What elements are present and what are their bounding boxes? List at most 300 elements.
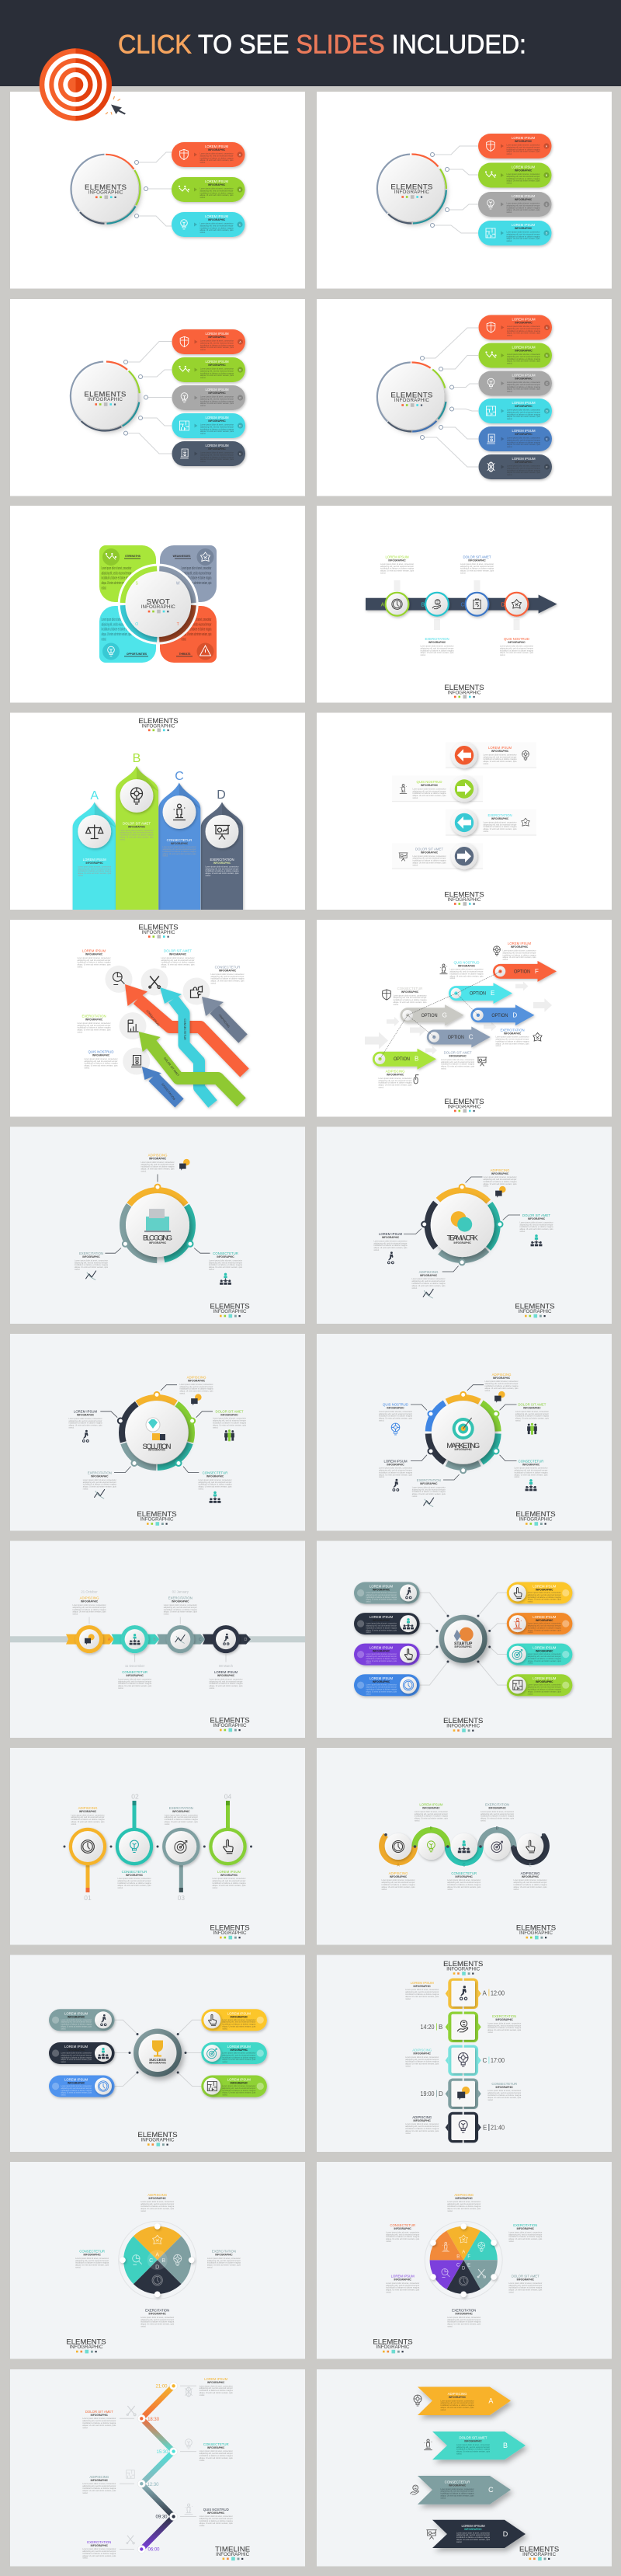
icon: gears bbox=[391, 1423, 400, 1435]
callout: adipiscing bbox=[82, 2475, 116, 2494]
time labels: 15:30 bbox=[156, 2450, 168, 2455]
time labels: 06:00 bbox=[147, 2548, 160, 2553]
logo bbox=[138, 717, 179, 732]
logo: INFOGRAPHIC bbox=[446, 1724, 480, 1729]
callout: consectetur: INFOGRAPHIC bbox=[206, 1475, 224, 1478]
callout: lorem ipsum: INFOGRAPHIC bbox=[85, 953, 103, 956]
pill left 1 bbox=[49, 2009, 115, 2031]
arrow labels: CONSECTETUR bbox=[183, 1018, 186, 1040]
callout: 02 January exercitation bbox=[164, 1590, 198, 1616]
callout: dolor sit amet: DOLOR SIT AMET bbox=[444, 1051, 472, 1055]
icon: org bbox=[526, 1479, 536, 1491]
arrow: option B green bbox=[373, 1049, 436, 1070]
icon: chat bbox=[191, 1394, 202, 1405]
callout: dolor sit amet bbox=[520, 1213, 553, 1233]
arrow tag A bbox=[418, 2386, 511, 2415]
callout: adipiscing: INFOGRAPHIC bbox=[414, 2052, 432, 2056]
step circle C bbox=[464, 592, 489, 617]
icon circles bbox=[106, 966, 210, 1075]
callout: exercitation: EXERCITATION bbox=[87, 2540, 111, 2544]
pill left 3 bbox=[354, 1644, 420, 1666]
logo: ELEMENTS bbox=[137, 1510, 177, 1519]
arrow: option D blue: D bbox=[512, 1011, 517, 1018]
pie chart: E bbox=[467, 2263, 470, 2268]
pill B green bbox=[172, 177, 245, 202]
letters above arrows bbox=[90, 752, 226, 802]
icon: chat bbox=[179, 1159, 190, 1171]
panel: startup hub bbox=[317, 1541, 612, 1738]
ring with hub bbox=[122, 1398, 192, 1467]
pill right 1 bbox=[507, 1582, 572, 1603]
callout: lorem ipsum: LOREM IPSUM bbox=[391, 2275, 415, 2278]
callout: lorem ipsum bbox=[503, 942, 536, 961]
pill F dark bbox=[478, 454, 552, 479]
letters above arrows: B bbox=[133, 752, 141, 765]
logo: INFOGRAPHIC bbox=[376, 2345, 410, 2350]
wave band bbox=[382, 1830, 546, 1863]
callout: lorem ipsum: LOREM IPSUM bbox=[488, 746, 512, 750]
logo: ELEMENTS bbox=[519, 2545, 559, 2553]
pill C gray bbox=[172, 385, 245, 410]
pill B green bbox=[478, 163, 551, 188]
logo: ELEMENTS bbox=[516, 1924, 556, 1933]
callout: lorem ipsum bbox=[199, 2377, 233, 2397]
icon: pie magnifier bbox=[113, 973, 124, 985]
pie chart: B bbox=[456, 2254, 460, 2259]
callout: 11 December consectetur bbox=[118, 1664, 152, 1690]
callout: exercitation: EXERCITATION bbox=[82, 1015, 106, 1018]
callout: dolor sit amet bbox=[413, 847, 446, 866]
icon: target bulb bbox=[414, 2395, 422, 2406]
callout: quis nostrud bbox=[84, 1050, 118, 1069]
callout: exercitation: EXERCITATION bbox=[513, 2223, 537, 2227]
callout: 21 October adipiscing: INFOGRAPHIC bbox=[81, 1600, 99, 1603]
callout: 11 December consectetur: INFOGRAPHIC bbox=[126, 1674, 144, 1677]
logo: INFOGRAPHIC bbox=[448, 1105, 481, 1109]
logo: ELEMENTS bbox=[515, 1302, 555, 1311]
callout: adipiscing: ADIPISCING bbox=[147, 2193, 168, 2197]
title: click to see slides included: CLICK TO SEE SLIDES INCLUDED: bbox=[118, 30, 526, 60]
icon: strengths bbox=[102, 548, 120, 566]
callout: dolor sit amet bbox=[441, 1051, 475, 1070]
row 2 card bbox=[392, 775, 483, 802]
tag text C: INFOGRAPHIC bbox=[449, 2484, 467, 2487]
icon: virus bbox=[522, 818, 529, 826]
pill A orange: A bbox=[239, 340, 241, 343]
arrow labels: ADIPISCING bbox=[218, 1014, 231, 1029]
panel: teamwork ring bbox=[317, 1126, 612, 1324]
panel: four rising arrows bbox=[10, 713, 305, 910]
ring nodes bbox=[123, 1185, 193, 1247]
panel: three option circle bbox=[10, 92, 305, 289]
pill C cyan bbox=[172, 212, 245, 237]
central SWOT circle: SWOT bbox=[147, 598, 170, 607]
callout: exercitation: INFOGRAPHIC bbox=[215, 2254, 233, 2257]
icon circle D bbox=[205, 815, 239, 848]
square B bbox=[446, 2011, 481, 2042]
time label C bbox=[483, 2057, 505, 2064]
callout: consectetur: CONSECTETUR bbox=[122, 1870, 147, 1874]
label: opportunities: OPPORTUNITIES bbox=[127, 653, 147, 656]
callout: consectetur bbox=[209, 1251, 243, 1271]
callout: adipiscing: INFOGRAPHIC bbox=[188, 1380, 206, 1383]
step circle B bbox=[425, 592, 449, 617]
pill D cyan: D bbox=[239, 424, 241, 427]
icon: opportunities bbox=[102, 643, 120, 660]
callout: lorem ipsum: LOREM IPSUM bbox=[419, 1803, 443, 1807]
callout: lorem ipsum bbox=[374, 1232, 408, 1251]
callout: exercitation: INFOGRAPHIC bbox=[517, 2227, 535, 2230]
ring with hub bbox=[123, 1190, 193, 1260]
callout: quis nostrud: INFOGRAPHIC bbox=[508, 641, 526, 644]
logo: ELEMENTS bbox=[443, 1717, 483, 1725]
logo bbox=[444, 684, 484, 698]
step B bbox=[112, 1625, 160, 1653]
pill A orange bbox=[478, 315, 552, 340]
callout: exercitation: INFOGRAPHIC bbox=[488, 1807, 506, 1810]
panel: woven diagonal arrows bbox=[10, 920, 305, 1117]
callout: adipiscing: INFOGRAPHIC bbox=[149, 1157, 167, 1161]
horizontal band bbox=[10, 1636, 305, 1642]
ring with hub: BLOGGING bbox=[143, 1234, 172, 1243]
callout: adipiscing dark bbox=[405, 2115, 439, 2135]
central hub: INFOGRAPHIC bbox=[149, 2062, 167, 2065]
logo bbox=[444, 1098, 484, 1112]
callout: exercitation dark bbox=[141, 2309, 175, 2327]
pill E dark bbox=[172, 441, 245, 466]
callout: adipiscing: INFOGRAPHIC bbox=[79, 1810, 97, 1813]
time label E bbox=[483, 2124, 505, 2132]
logo: ELEMENTS bbox=[210, 1717, 250, 1725]
callout: consectetur bbox=[199, 2442, 233, 2462]
time label E: E bbox=[483, 2124, 487, 2132]
callout: lorem ipsum: LOREM IPSUM bbox=[385, 555, 409, 559]
ring nodes bbox=[118, 1392, 195, 1466]
icon: people bbox=[224, 1429, 234, 1441]
step D bbox=[203, 1625, 251, 1653]
icon: gear bulb bbox=[522, 750, 529, 761]
callout: exercitation: INFOGRAPHIC bbox=[496, 2018, 514, 2021]
callout: 02 January exercitation: 02 January bbox=[172, 1590, 189, 1594]
arrow: gray bbox=[202, 997, 243, 1039]
logo bbox=[515, 1302, 555, 1318]
callout: consectetur: CONSECTETUR bbox=[203, 1471, 227, 1475]
icon: money hand bbox=[410, 2485, 418, 2494]
pie chart: B bbox=[161, 2258, 165, 2264]
logo bbox=[137, 2131, 178, 2146]
block: opportunities bbox=[99, 606, 156, 663]
pill E blue: E bbox=[546, 437, 548, 440]
callout: consectetur bbox=[386, 2223, 420, 2243]
step 01 yellow: 01 bbox=[84, 1894, 92, 1902]
panel: wave steps bbox=[317, 1748, 612, 1945]
callout: 02 January exercitation: INFOGRAPHIC bbox=[172, 1600, 189, 1603]
callout: dolor sit amet: INFOGRAPHIC bbox=[468, 559, 486, 562]
pill D cyan: D bbox=[546, 231, 548, 235]
block: weaknesses bbox=[160, 545, 217, 602]
icon: board bbox=[399, 853, 408, 861]
tag text D: INFOGRAPHIC bbox=[464, 2528, 482, 2531]
pie chart: F bbox=[467, 2254, 470, 2259]
logo bbox=[137, 1510, 177, 1526]
callout: lorem ipsum: LOREM IPSUM bbox=[83, 858, 106, 862]
callout: quis nostrud bbox=[199, 2508, 233, 2527]
callout: consectetur: CONSECTETUR bbox=[215, 966, 240, 969]
circle hub with logo: INFOGRAPHIC bbox=[88, 397, 123, 402]
arrow labels: DOLOR SIT AMET bbox=[163, 1057, 180, 1077]
arrow tip shading bbox=[95, 766, 243, 827]
row 1 card bbox=[446, 742, 536, 768]
callout: lorem ipsum bbox=[380, 555, 415, 575]
callout: adipiscing: ADIPISCING bbox=[412, 2049, 432, 2052]
callout: lorem ipsum: INFOGRAPHIC bbox=[387, 1463, 404, 1466]
logo bbox=[210, 1302, 250, 1318]
logo: INFOGRAPHIC bbox=[519, 1309, 552, 1314]
callout: dolor sit amet bbox=[213, 1409, 247, 1429]
callout: adipiscing gray: INFOGRAPHIC bbox=[420, 1274, 438, 1277]
ring nodes bbox=[422, 1185, 503, 1265]
panel: blogging ring bbox=[10, 1126, 305, 1324]
logo: ELEMENTS bbox=[66, 2338, 106, 2347]
callout: quis nostrud bbox=[379, 1403, 413, 1422]
pill C cyan: C bbox=[239, 223, 241, 226]
faint icons bbox=[127, 2387, 193, 2544]
pie chart: D bbox=[462, 2266, 466, 2271]
callout: adipiscing: ADIPISCING bbox=[389, 1871, 408, 1875]
arrow C blue bbox=[158, 783, 200, 910]
central SWOT circle: T bbox=[177, 622, 179, 627]
arrow: option C slate: C bbox=[469, 1033, 474, 1041]
callout: adipiscing: ADIPISCING bbox=[148, 1154, 168, 1157]
callout: consectetur: CONSECTETUR bbox=[390, 2223, 415, 2227]
pill B green: B bbox=[546, 354, 548, 357]
time labels: 09:30 bbox=[155, 2515, 168, 2520]
step C: C bbox=[199, 1638, 202, 1642]
callout: 02 January exercitation: EXERCITATION bbox=[168, 1596, 193, 1600]
step D: D bbox=[245, 1638, 248, 1642]
central hub: STARTUP bbox=[454, 1642, 473, 1647]
callout: consectetur: CONSECTETUR bbox=[213, 1251, 238, 1255]
callout: exercitation dark: INFOGRAPHIC bbox=[149, 2313, 167, 2316]
logo: INFOGRAPHIC bbox=[213, 1309, 247, 1314]
arrow D dark bbox=[201, 802, 243, 910]
arrow tag A: A bbox=[488, 2397, 493, 2405]
time label A bbox=[483, 1989, 505, 1996]
callout: consectetur bbox=[447, 1871, 481, 1891]
pill right 1 bbox=[201, 2009, 267, 2031]
step letters: B bbox=[422, 603, 425, 607]
callout: adipiscing: ADIPISCING bbox=[187, 1376, 206, 1380]
arrow: option F orange bbox=[493, 961, 557, 982]
callout: lorem ipsum bbox=[405, 1981, 439, 2000]
callout: lorem ipsum bbox=[213, 1870, 246, 1889]
logo bbox=[66, 2338, 106, 2353]
wave letters: E bbox=[529, 1863, 532, 1868]
callout: adipiscing: INFOGRAPHIC bbox=[149, 2197, 167, 2200]
callout: adipiscing: INFOGRAPHIC bbox=[91, 2479, 109, 2482]
callout: adipiscing gray: ADIPISCING bbox=[419, 1270, 439, 1274]
callout: quis nostrud bbox=[413, 780, 446, 799]
callout: exercitation bbox=[82, 2540, 116, 2560]
callout: dolor sit amet: DOLOR SIT AMET bbox=[463, 555, 491, 559]
callout: exercitation: INFOGRAPHIC bbox=[172, 1810, 190, 1813]
callout: dolor sit amet bbox=[515, 1403, 550, 1422]
callout: consectetur bbox=[75, 2250, 109, 2268]
arrow: option D blue bbox=[470, 1004, 534, 1025]
callout: quis nostrud: QUIS NOSTRUD bbox=[504, 637, 529, 641]
callout: consectetur: INFOGRAPHIC bbox=[496, 2086, 514, 2089]
callout: dolor sit amet: DOLOR SIT AMET bbox=[85, 2410, 113, 2414]
square E bbox=[446, 2111, 481, 2143]
panel: solution ring bbox=[10, 1334, 305, 1530]
tag text B bbox=[456, 2436, 491, 2455]
callout: exercitation bbox=[495, 1028, 529, 1047]
logo bbox=[210, 1924, 250, 1939]
logo bbox=[443, 1717, 483, 1732]
logo bbox=[215, 2545, 250, 2560]
icon: chat bbox=[495, 1186, 506, 1198]
callout: consectetur: INFOGRAPHIC bbox=[83, 2254, 101, 2257]
arrow: option F orange: F bbox=[535, 968, 539, 975]
circle hub with logo bbox=[71, 362, 140, 430]
step letters: D bbox=[501, 603, 505, 607]
circle bulb bbox=[418, 1833, 444, 1860]
callout: adipiscing dark: INFOGRAPHIC bbox=[522, 1875, 539, 1878]
ring with hub: TEAMWORK bbox=[447, 1234, 478, 1243]
callout: exercitation: EXERCITATION bbox=[487, 813, 512, 817]
callout: lorem ipsum: LOREM IPSUM bbox=[217, 1870, 241, 1874]
callout: adipiscing bbox=[379, 1070, 412, 1089]
tag text C: CONSECTETUR bbox=[445, 2480, 470, 2484]
callout: quis nostrud: QUIS NOSTRUD bbox=[203, 2508, 229, 2512]
pill right 4 bbox=[507, 1674, 572, 1696]
tag text D: LOREM IPSUM bbox=[461, 2524, 485, 2528]
pill right 2 bbox=[507, 1613, 572, 1634]
letters above arrows: D bbox=[217, 788, 226, 802]
callout: adipiscing: INFOGRAPHIC bbox=[456, 2197, 474, 2200]
callout: adipiscing: ADIPISCING bbox=[78, 1806, 98, 1810]
pill A orange: A bbox=[546, 144, 548, 148]
icon: person bbox=[424, 2439, 432, 2450]
callout: dolor sit amet: DOLOR SIT AMET bbox=[164, 949, 192, 953]
logo: INFOGRAPHIC bbox=[213, 1723, 247, 1728]
icon: chart bbox=[423, 1498, 434, 1507]
logo: ELEMENTS bbox=[210, 1302, 250, 1311]
icon: chart bbox=[423, 1289, 433, 1298]
callout: adipiscing: INFOGRAPHIC bbox=[493, 1377, 511, 1380]
callout: exercitation: EXERCITATION bbox=[79, 1251, 103, 1255]
callout: lorem ipsum bbox=[379, 1459, 413, 1478]
callout: 21 October adipiscing: ADIPISCING bbox=[80, 1596, 99, 1600]
icon: runner bbox=[393, 1479, 399, 1491]
circle hub with logo bbox=[71, 155, 140, 224]
callout: adipiscing: INFOGRAPHIC bbox=[387, 1074, 404, 1077]
time label B: B bbox=[439, 2024, 442, 2031]
pill A orange: A bbox=[546, 326, 548, 329]
icon circle C bbox=[163, 795, 196, 829]
callout: lorem ipsum: INFOGRAPHIC bbox=[220, 1874, 238, 1877]
callout: quis nostrud: QUIS NOSTRUD bbox=[454, 960, 479, 964]
callout: consectetur: INFOGRAPHIC bbox=[207, 2446, 225, 2449]
callout: exercitation: INFOGRAPHIC bbox=[85, 1018, 103, 1022]
logo bbox=[519, 2545, 559, 2560]
icon: virus bbox=[533, 1032, 542, 1041]
callout: exercitation: INFOGRAPHIC bbox=[82, 1255, 100, 1258]
connector dots bbox=[129, 2033, 186, 2073]
callout: dolor sit amet: DOLOR SIT AMET bbox=[123, 822, 151, 825]
callout: exercitation: EXERCITATION bbox=[169, 1806, 193, 1810]
callout: adipiscing bbox=[484, 1373, 519, 1392]
circle hub with logo bbox=[377, 154, 446, 224]
callout: exercitation: EXERCITATION bbox=[425, 637, 449, 641]
callout: 11 December consectetur: 11 December bbox=[125, 1664, 145, 1668]
callout: dolor sit amet bbox=[161, 949, 195, 968]
pill left 2 bbox=[354, 1613, 420, 1634]
callout: exercitation dark: EXERCITATION bbox=[452, 2309, 476, 2313]
wave nodes bbox=[384, 1833, 545, 1848]
block: threats bbox=[160, 606, 217, 663]
callout: lorem ipsum bbox=[78, 949, 111, 968]
callout: adipiscing bbox=[483, 1168, 517, 1188]
label: threats: THREATS bbox=[179, 653, 190, 656]
callout: exercitation: INFOGRAPHIC bbox=[420, 1482, 438, 1485]
callout: consectetur: CONSECTETUR bbox=[203, 2442, 229, 2446]
pie chart: D bbox=[155, 2264, 159, 2270]
circle hub with logo: ELEMENTS bbox=[84, 390, 126, 399]
callout: adipiscing bbox=[141, 1154, 175, 1173]
callout: exercitation dark: INFOGRAPHIC bbox=[456, 2313, 474, 2316]
pill A orange: A bbox=[239, 153, 241, 156]
logo bbox=[515, 1510, 556, 1526]
logo: ELEMENTS bbox=[444, 1098, 484, 1106]
callout: adipiscing bbox=[405, 2049, 439, 2068]
pill A orange bbox=[172, 142, 245, 167]
step 02 teal bbox=[116, 1793, 153, 1865]
tag text B: INFOGRAPHIC bbox=[464, 2440, 482, 2443]
tag text A: ADIPISCING bbox=[448, 2392, 467, 2396]
letters above arrows: A bbox=[90, 789, 99, 802]
callout: adipiscing: INFOGRAPHIC bbox=[491, 1172, 509, 1175]
callout: dolor sit amet: DOLOR SIT AMET bbox=[522, 1213, 550, 1217]
wave letters: D bbox=[496, 1826, 499, 1831]
pill B green: B bbox=[546, 174, 548, 177]
logo: ELEMENTS bbox=[373, 2338, 413, 2347]
callout: consectetur: CONSECTETUR bbox=[167, 838, 192, 842]
pill C gray bbox=[478, 192, 551, 217]
callout: exercitation: INFOGRAPHIC bbox=[428, 641, 446, 644]
step 01 yellow bbox=[69, 1828, 106, 1902]
callout: exercitation dark: EXERCITATION bbox=[145, 2309, 169, 2313]
logo: INFOGRAPHIC bbox=[141, 2138, 175, 2143]
tag text D bbox=[456, 2524, 491, 2543]
callout: exercitation: EXERCITATION bbox=[500, 1028, 525, 1032]
icon: puzzle bbox=[191, 986, 202, 997]
time labels: 21:00 bbox=[155, 2385, 168, 2390]
callout: adipiscing: INFOGRAPHIC bbox=[390, 1875, 408, 1878]
arrow: cyan bbox=[160, 987, 213, 1104]
callout: quis nostrud: QUIS NOSTRUD bbox=[88, 1050, 113, 1054]
pie chart: C bbox=[456, 2263, 460, 2268]
callout: exercitation: INFOGRAPHIC bbox=[91, 1475, 109, 1478]
callout: lorem ipsum: LOREM IPSUM bbox=[508, 942, 531, 945]
callout: lorem ipsum bbox=[68, 1410, 102, 1429]
callout: exercitation: EXERCITATION bbox=[210, 858, 234, 862]
icon: weaknesses bbox=[197, 548, 214, 566]
logo: ELEMENTS bbox=[138, 924, 179, 932]
logo: INFOGRAPHIC bbox=[448, 690, 481, 696]
callout: lorem ipsum: LOREM IPSUM bbox=[74, 1410, 97, 1414]
pie chart: A bbox=[155, 2252, 159, 2257]
